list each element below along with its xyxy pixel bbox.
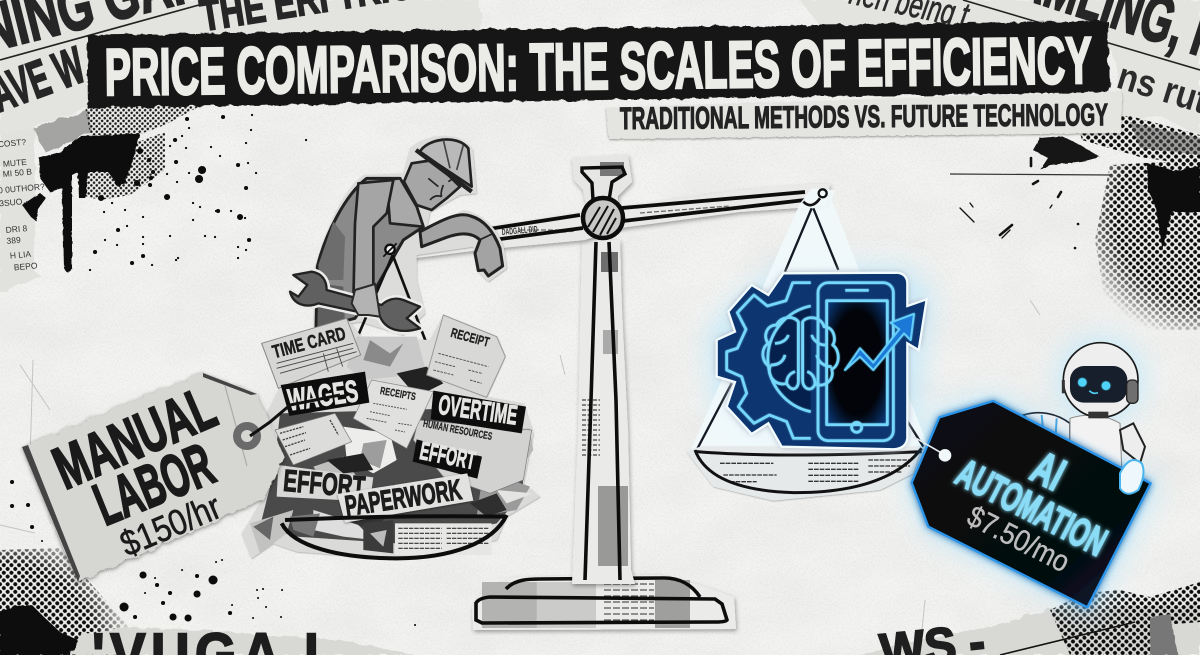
right pan hanger paper <box>690 188 928 452</box>
ink blots <box>1033 136 1100 170</box>
AI icon: gear, phone, brain, arrow <box>717 273 927 449</box>
wages tag <box>281 372 369 418</box>
robot <box>1023 343 1138 467</box>
torso <box>316 178 423 328</box>
tag eyelet <box>939 449 951 462</box>
hanger wires <box>697 208 923 450</box>
column small text: MUTE <box>2 157 28 169</box>
gear outline <box>727 283 811 438</box>
wrench <box>290 272 420 331</box>
time card label: TIME CARD <box>270 322 348 362</box>
bottom right: torn paper and halftone <box>860 582 1200 655</box>
halftone under the ink <box>75 132 165 200</box>
effort black tag <box>413 437 482 479</box>
balance scale <box>385 155 830 630</box>
receipt paper <box>427 315 505 397</box>
paper scrap <box>0 0 480 135</box>
rule line <box>963 0 1200 70</box>
phone home button <box>852 422 862 432</box>
scale post <box>572 240 635 584</box>
halftone band <box>1050 582 1200 655</box>
torn newspaper: top left <box>0 0 480 152</box>
small torn note <box>275 413 352 465</box>
gray torn under-layer <box>33 110 92 152</box>
halftone band <box>1075 116 1200 166</box>
tag price: $150/hr <box>114 486 227 564</box>
ink splatter: lower left <box>12 482 415 625</box>
hard hat <box>420 139 472 187</box>
torn paper column: left <box>0 126 52 292</box>
robot left arm <box>1023 413 1070 443</box>
AI tag body <box>912 401 1151 607</box>
effort paper tag: EFFORT <box>282 464 367 505</box>
side paper <box>497 428 533 473</box>
inner gear arc <box>768 306 811 412</box>
phone body <box>818 283 893 441</box>
worker right arm and hand <box>420 215 503 276</box>
ink splatter: right <box>960 158 1078 248</box>
scale base <box>472 575 736 630</box>
overtime tag <box>431 389 526 433</box>
human resources sheet <box>413 418 532 493</box>
column small text <box>0 136 52 273</box>
column small text: 389 <box>6 235 21 246</box>
beam caption: DADGALL DID <box>501 224 538 237</box>
automation label: AUTOMATION <box>949 451 1114 565</box>
torn newspaper: top right <box>800 0 1200 330</box>
tag label: manual labor: MANUAL <box>44 374 225 502</box>
growth arrow <box>845 314 914 370</box>
ink blot with drips: top left <box>22 132 165 272</box>
AI label: AI <box>1023 441 1074 501</box>
robot smile <box>1089 391 1098 393</box>
phone speaker <box>845 286 869 294</box>
rule line <box>1000 622 1135 655</box>
Manual labor price tag <box>22 373 340 582</box>
icon dark silhouette <box>717 273 927 449</box>
subtitle strip <box>606 92 1122 139</box>
torn rule <box>950 174 1112 175</box>
column small text: MI 50 B <box>2 166 33 179</box>
worker face <box>404 160 460 210</box>
hanger wires <box>343 255 445 392</box>
worker figure <box>313 136 507 335</box>
scale top cap <box>572 155 632 205</box>
left scale pan <box>282 515 507 558</box>
worker fist <box>352 284 380 317</box>
column small text: DRI 8 <box>5 223 28 235</box>
phone screen <box>827 301 887 425</box>
right side: AI pan, icon and robot (zoomed local coordinates) <box>687 188 1160 613</box>
scale pivot <box>583 198 623 238</box>
tight glow around icon, tag and robot <box>707 267 1160 613</box>
bottom left corner: halftone, ink and torn paper <box>0 548 415 655</box>
robot headset <box>1127 380 1138 403</box>
tag eyelet <box>237 426 257 446</box>
brain: left hemisphere <box>763 318 798 389</box>
halftone field <box>1095 160 1200 330</box>
robot head <box>1063 343 1138 417</box>
column small text: BEPO <box>13 260 38 272</box>
paperwork tag <box>337 473 473 523</box>
halftone strip <box>85 106 200 136</box>
title banner <box>87 21 1110 109</box>
effort black tag: EFFORT <box>418 437 478 475</box>
effort paper tag <box>277 464 373 505</box>
banner shape <box>87 21 1110 108</box>
human resources label: HUMAN RESOURCES <box>422 418 493 443</box>
column small text: H LIA <box>9 249 32 261</box>
pile backing <box>242 315 540 559</box>
tag string <box>913 437 945 455</box>
robot eyes <box>1078 378 1110 390</box>
tag shape <box>22 373 284 582</box>
worker left arm <box>353 180 393 303</box>
robot hand <box>1120 423 1145 494</box>
scale hook <box>383 243 397 257</box>
receipts label: RECEIPTS <box>379 385 417 403</box>
overtime tag: OVERTIME <box>436 389 519 431</box>
beam hook <box>803 189 827 205</box>
worker sticker backing <box>313 136 507 335</box>
paperwork tag: PAPERWORK <box>343 474 464 523</box>
receipts slip <box>353 380 433 448</box>
wages tag: WAGES <box>286 374 360 418</box>
AI tag price: $7.50/mo <box>962 500 1075 579</box>
tag string <box>250 395 340 436</box>
robot torso <box>1070 415 1122 467</box>
robot neck <box>1088 412 1108 418</box>
receipt label: RECEIPT <box>449 325 491 350</box>
brain: right hemisphere <box>803 318 838 389</box>
dark hub behind the brain <box>768 306 811 412</box>
rule line <box>0 0 217 60</box>
right scale pan <box>687 447 922 501</box>
scale beam <box>385 184 830 260</box>
AI tag labels <box>949 441 1114 579</box>
left side: worker and pile (zoomed local coordinates) <box>242 136 540 559</box>
time card <box>262 318 361 388</box>
tag label: labor: LABOR <box>85 430 223 538</box>
crumpled paper mass <box>250 337 533 553</box>
robot visor <box>1070 366 1127 403</box>
ink splatter: left <box>90 115 306 270</box>
